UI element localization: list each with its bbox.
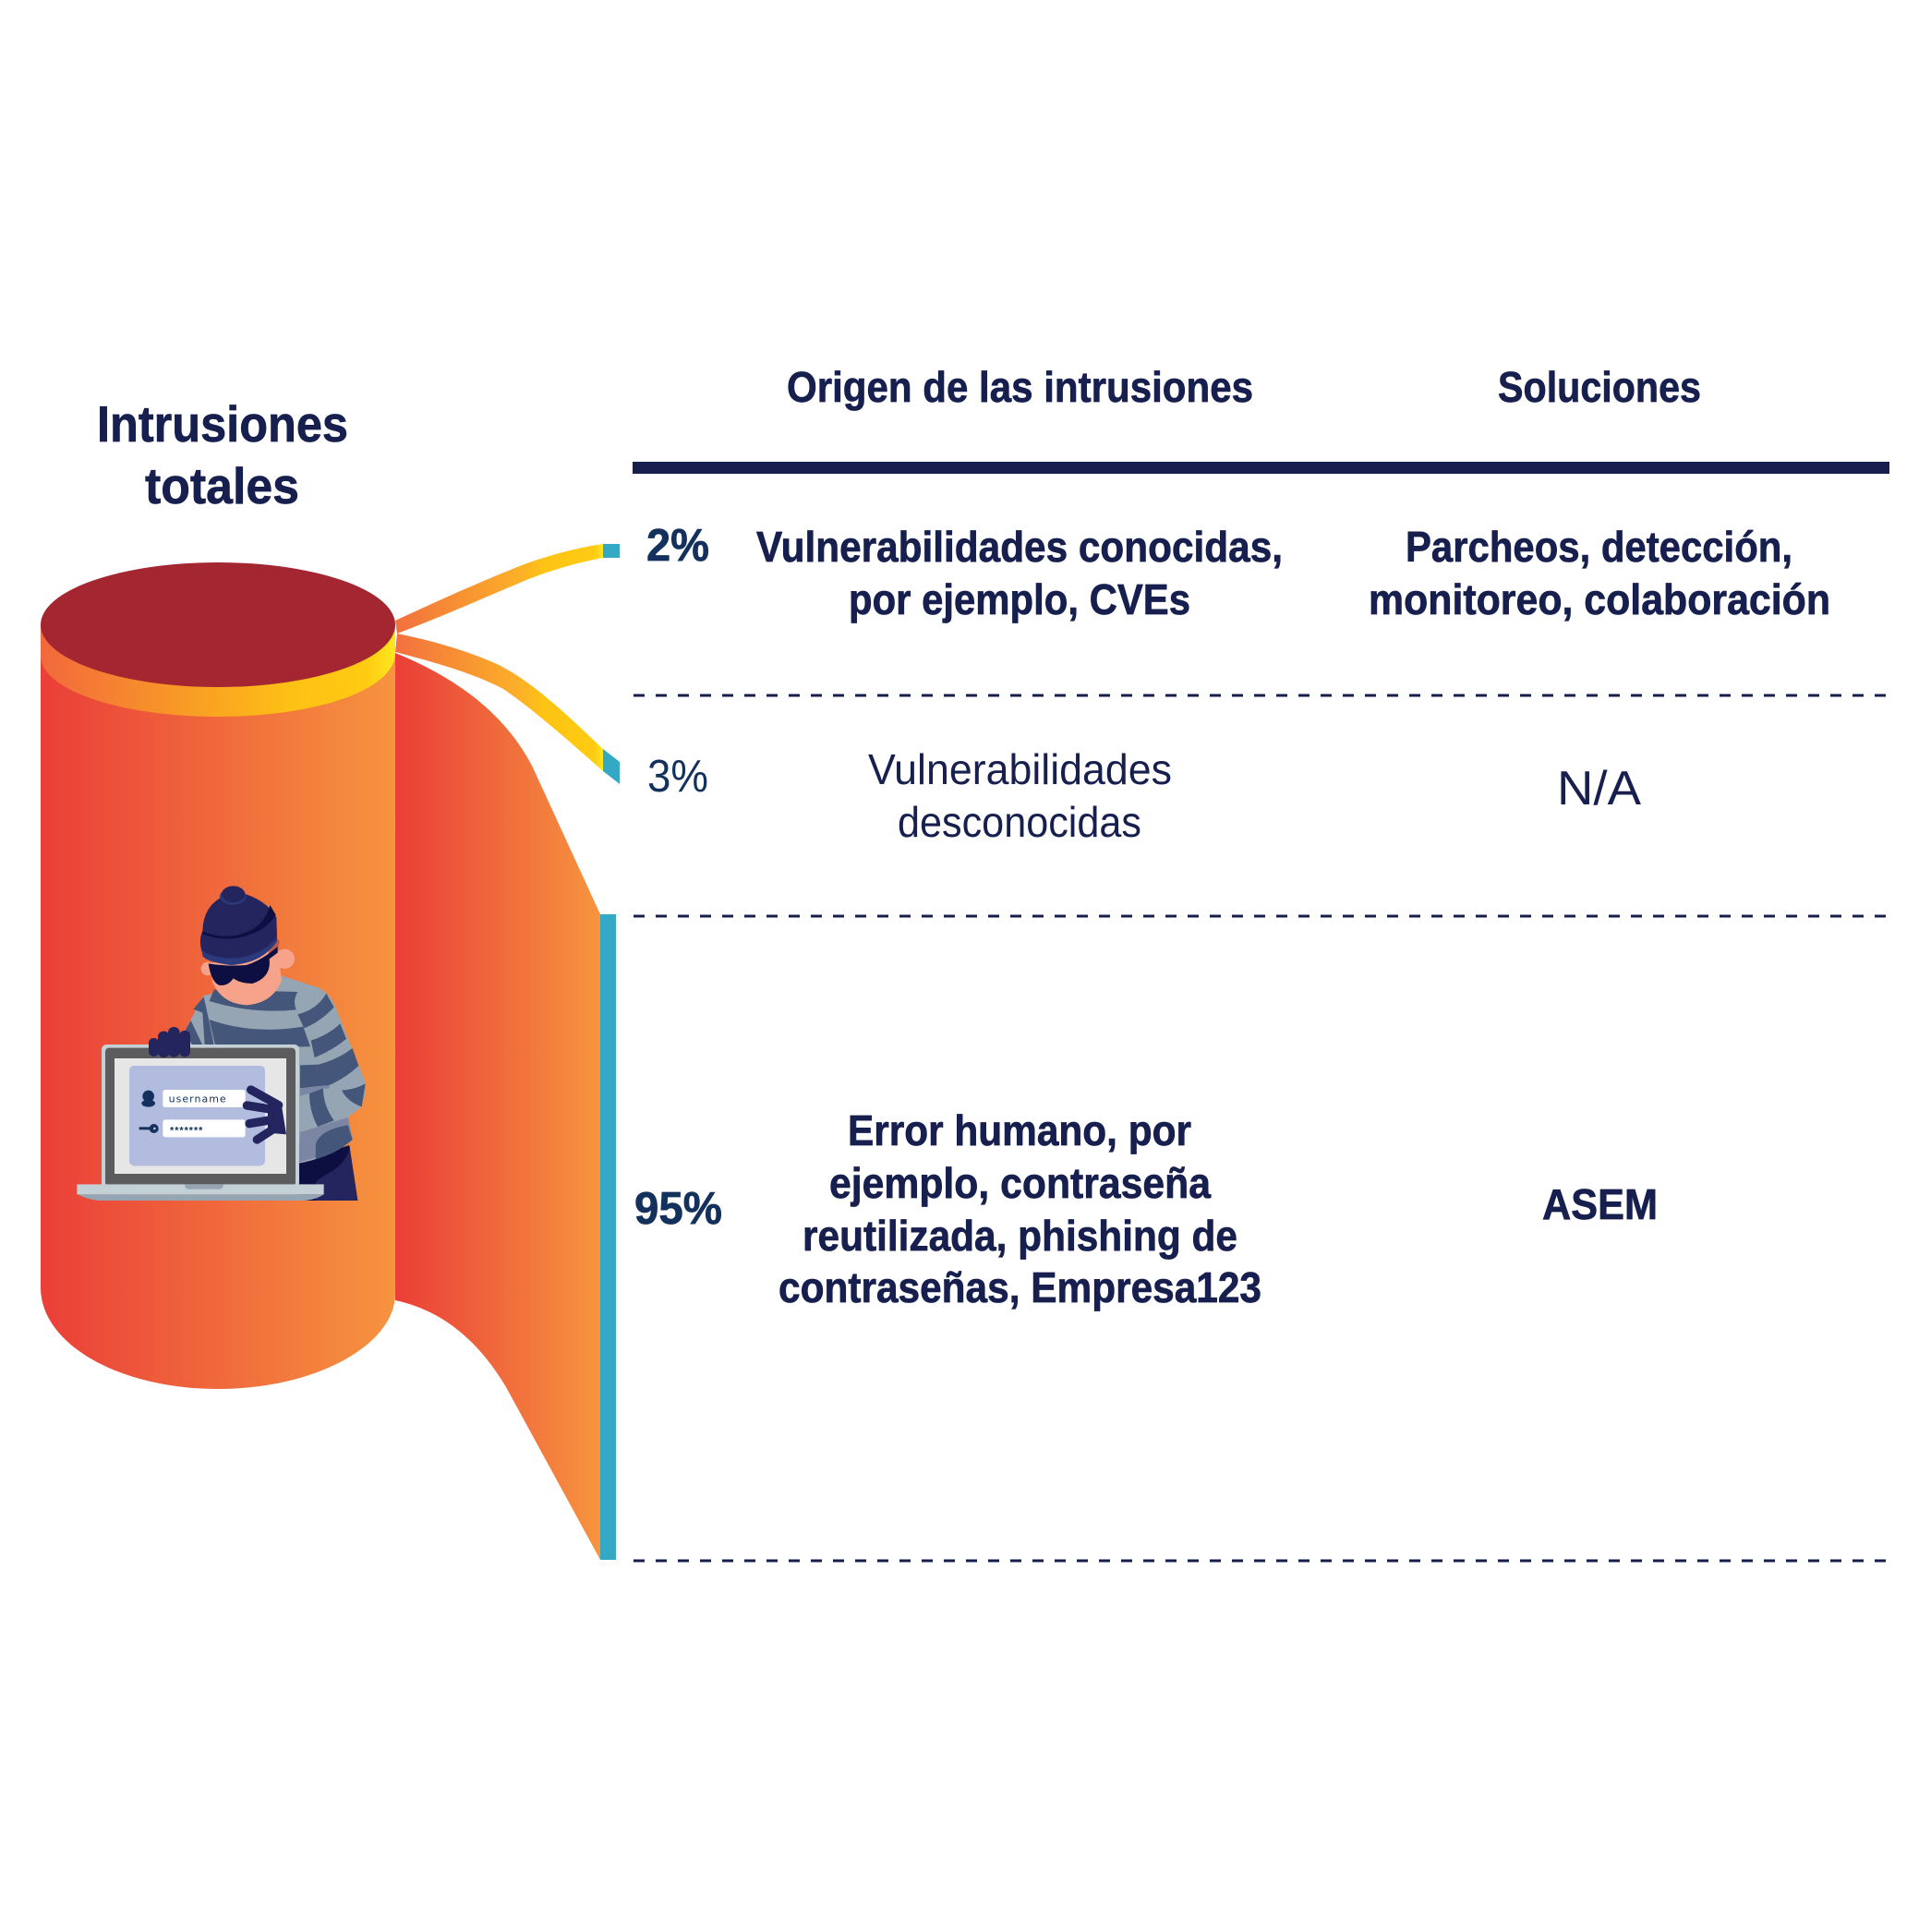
row 2 — [647, 745, 1641, 846]
origin: unknown vulnerabilities — [868, 745, 1172, 846]
laptop — [77, 1044, 324, 1201]
percent 2%: 2% — [646, 521, 709, 571]
thief sweater — [185, 975, 366, 1164]
solutions: patching: monitoreo, colaboración — [1369, 575, 1830, 623]
percent 95%: 95% — [634, 1184, 722, 1234]
icon: user — [141, 1091, 155, 1107]
thief left hand — [149, 1027, 190, 1057]
ribbon: 2% flow — [395, 544, 620, 634]
origin: known vulnerabilities: Vulnerabilidades conocidas, — [756, 523, 1283, 571]
username field — [163, 1090, 246, 1107]
origin: unknown vulnerabilities: desconocidas — [898, 798, 1141, 846]
origin: known vulnerabilities: por ejemplo, CVEs — [849, 575, 1190, 623]
password field: ******* — [170, 1126, 203, 1137]
username field: username — [169, 1093, 226, 1105]
thief legs — [297, 1145, 357, 1201]
thief head — [200, 886, 295, 1005]
origin: human error: ejemplo, contraseña — [829, 1159, 1211, 1207]
row 1 — [646, 521, 1830, 623]
row 3 — [634, 1106, 1658, 1311]
thief right hand — [247, 1090, 286, 1140]
percent 3%: 3% — [647, 752, 708, 802]
icon: key — [139, 1124, 159, 1133]
big ribbon: 95% flow — [395, 653, 616, 1560]
origin: known vulnerabilities — [756, 523, 1283, 623]
heading: Intrusiones totales: Intrusiones — [97, 395, 348, 453]
heading: Intrusiones totales — [97, 395, 348, 514]
origin: human error: Error humano, por — [848, 1106, 1191, 1154]
solutions: ASEM: ASEM — [1542, 1180, 1658, 1228]
origin: unknown vulnerabilities: Vulnerabilidades — [868, 745, 1172, 793]
table header: Soluciones: Soluciones — [1498, 363, 1701, 411]
cylinder — [41, 562, 395, 1389]
table header: Origen de las intrusiones: Origen de las intrusiones — [787, 363, 1253, 411]
origin: human error: contraseñas, Empresa123 — [778, 1263, 1261, 1311]
origin: human error: reutilizada, phishing de — [803, 1212, 1237, 1260]
ribbon: 3% flow — [395, 634, 620, 784]
origin: human error — [778, 1106, 1261, 1311]
solutions: N/A: N/A — [1557, 762, 1641, 815]
header rule — [633, 462, 1889, 474]
heading: Intrusiones totales: totales — [145, 457, 299, 514]
illustration: thief with laptop — [77, 886, 366, 1201]
solutions: patching: Parcheos, detección, — [1406, 523, 1792, 571]
password field — [163, 1119, 246, 1137]
solutions: patching — [1369, 523, 1830, 623]
